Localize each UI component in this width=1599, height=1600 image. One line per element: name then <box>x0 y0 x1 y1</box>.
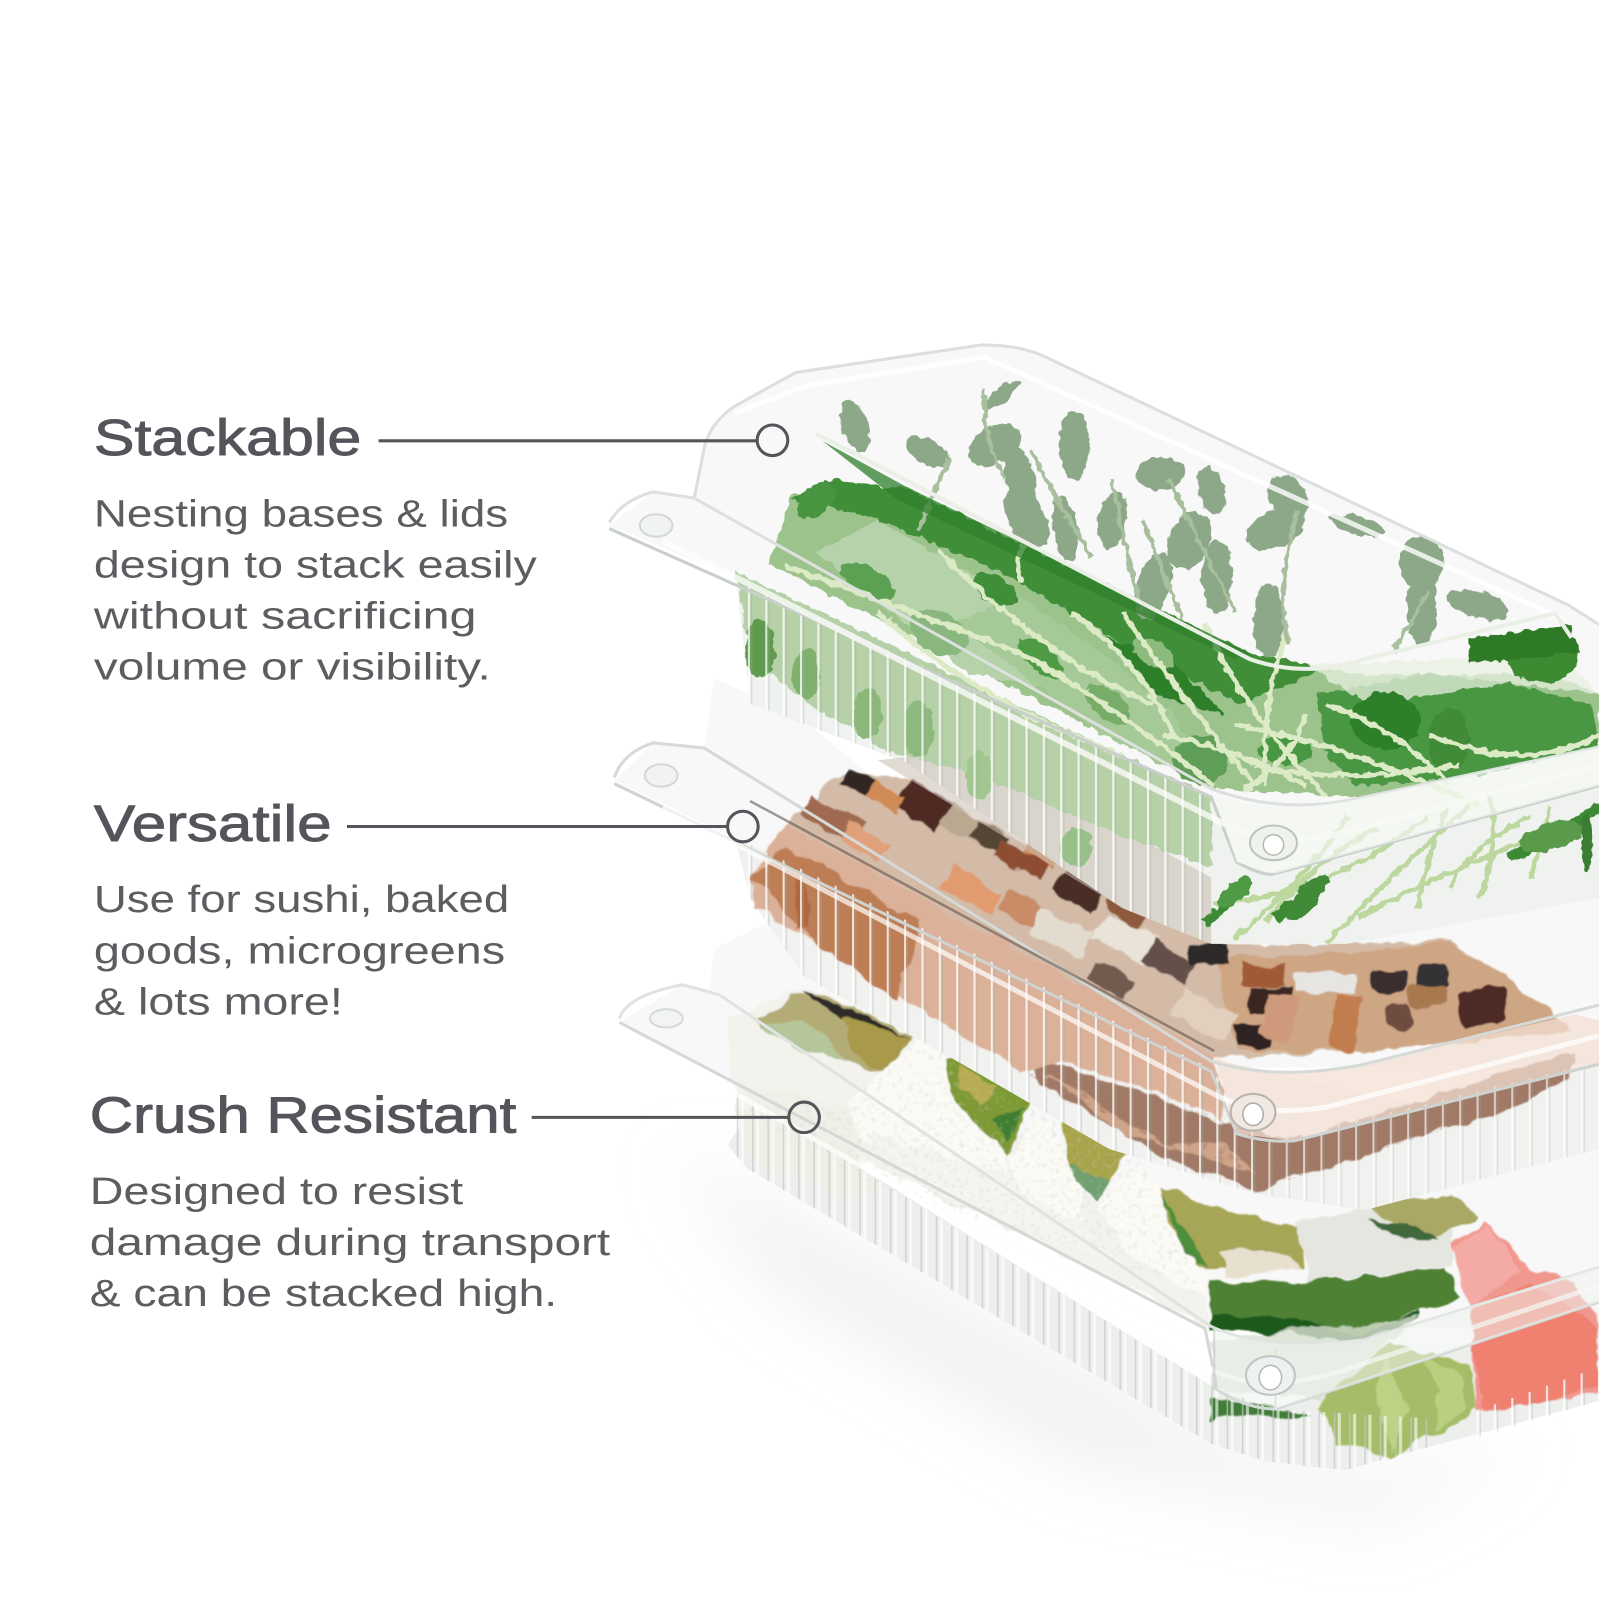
stems below rim <box>1204 796 1599 944</box>
bar lower crust <box>1020 1051 1574 1191</box>
top lid dome <box>609 345 1599 873</box>
middle flange and rim <box>614 743 1599 1141</box>
greens in lower wall <box>735 571 1211 867</box>
wasabi <box>1319 1344 1479 1459</box>
bar chunks <box>796 767 1505 1053</box>
connector line: Stackable <box>379 439 757 442</box>
bottom lid dome <box>619 918 1599 1329</box>
lower-right leaves <box>1213 811 1593 927</box>
bar contents <box>750 767 1574 1191</box>
bottom hinge nub <box>1246 1356 1295 1395</box>
lid front dark-green seam <box>822 441 1250 659</box>
callout: Versatile <box>94 795 758 1022</box>
container: microgreens (top) <box>609 345 1599 944</box>
sushi contents <box>728 992 1599 1459</box>
container: sushi (bottom) <box>619 918 1599 1470</box>
top base wall <box>737 582 1599 944</box>
lid stems <box>918 388 1429 653</box>
lower seaweed strip <box>1211 1398 1313 1420</box>
body text: Crush Resistant: & can be stacked high. <box>90 1272 557 1314</box>
middle hinge nub <box>1231 1094 1276 1131</box>
body text: Versatile: & lots more! <box>94 980 343 1022</box>
vegetable fillings <box>947 1056 1033 1156</box>
photo: stack of three clear containers <box>609 345 1599 1470</box>
bottom wall ribs <box>728 1092 1429 1470</box>
brown show-through at wall <box>878 750 1211 944</box>
middle rim tint <box>1214 1014 1599 1141</box>
lid outline and rim <box>609 345 1599 874</box>
heading: Versatile: Versatile <box>94 795 332 852</box>
pickled ginger <box>1453 1221 1599 1413</box>
middle corner stud <box>645 764 678 787</box>
body text: Versatile <box>94 878 509 1022</box>
body text: Versatile: Use for sushi, baked <box>94 878 509 920</box>
bar side crust seen through wall <box>750 823 1224 1117</box>
body text: Stackable <box>93 493 537 688</box>
pale stems over greens <box>786 520 1599 806</box>
bar top surface <box>785 773 1574 1057</box>
marker circle: Versatile <box>728 811 758 842</box>
lid leaves, seen through plastic <box>835 376 1514 657</box>
rice grain speckle <box>733 1038 1205 1298</box>
top corner stud <box>640 514 672 537</box>
body text: Versatile: goods, microgreens <box>94 929 505 971</box>
heading: Stackable: Stackable <box>94 409 361 466</box>
body text: Crush Resistant <box>90 1170 611 1314</box>
ground shadow <box>673 1153 1531 1520</box>
body text: Crush Resistant: Designed to resist <box>90 1170 464 1212</box>
middle wall ribs <box>735 837 1256 1194</box>
top hinge nub <box>1250 826 1297 860</box>
middle base wall <box>735 837 1599 1210</box>
connector line: Versatile <box>347 825 727 828</box>
middle inner dark seal line <box>750 801 1214 1051</box>
body text: Stackable: volume or visibility. <box>94 646 491 688</box>
body text: Stackable: Nesting bases & lids <box>94 493 508 535</box>
body text: Stackable: without sacrificing <box>93 595 477 637</box>
marker circle: Stackable <box>757 425 788 456</box>
seaweed band <box>1208 1267 1460 1333</box>
bottom flange and rim <box>619 985 1599 1409</box>
body text: Crush Resistant: damage during transport <box>90 1221 611 1263</box>
bottom corner stud <box>650 1009 683 1028</box>
body text: Stackable: design to stack easily <box>94 544 537 586</box>
callout: Stackable <box>93 409 788 688</box>
connector line: Crush Resistant <box>532 1116 789 1119</box>
top rim glaze <box>1214 747 1599 873</box>
marker circle: Crush Resistant <box>789 1102 819 1133</box>
bar crumb speckle <box>1020 1071 1566 1191</box>
container: baked bar (middle) <box>614 679 1599 1210</box>
callout: Crush Resistant <box>90 1087 819 1314</box>
main greens mass <box>768 475 1599 797</box>
bottom base wall <box>728 1102 1599 1470</box>
bottom rim glaze <box>1214 1267 1599 1409</box>
top wall ribs <box>737 582 1211 944</box>
rice pieces <box>848 1038 1012 1176</box>
heading: Crush Resistant: Crush Resistant <box>90 1087 516 1144</box>
middle lid dome <box>614 679 1599 1068</box>
